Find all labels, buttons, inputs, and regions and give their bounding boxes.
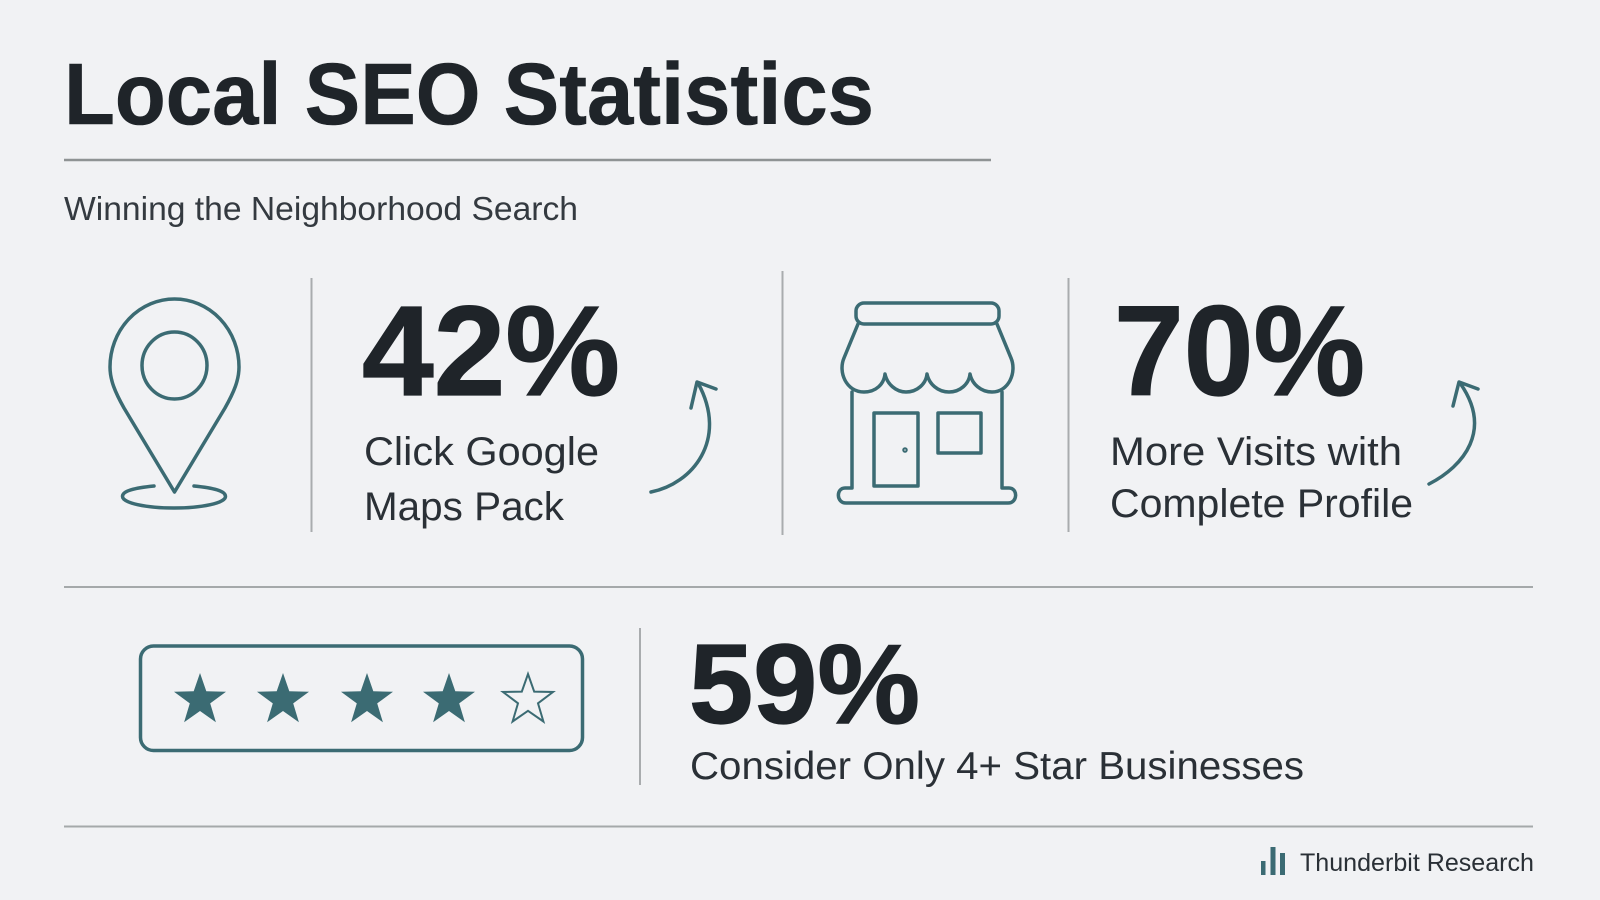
arrow: upward trend <box>651 382 716 492</box>
footer: source credit <box>1261 847 1534 877</box>
icon: storefront <box>838 303 1016 503</box>
stat: 59%: 59% <box>689 621 920 747</box>
label: More Visits with Complete Profile <box>1110 430 1413 526</box>
icon: map pin <box>110 299 239 508</box>
panel: complete profile statistic <box>838 280 1478 526</box>
panel: star rating statistic <box>140 621 1304 788</box>
panel: Google Maps Pack statistic <box>110 280 716 529</box>
subtitle: Winning the Neighborhood Search <box>64 190 578 227</box>
label: More Visits with Complete Profile: More Visits with <box>1110 430 1402 474</box>
label: Click Google Maps Pack: Click Google <box>364 430 599 474</box>
title: Local SEO Statistics <box>64 46 874 143</box>
header <box>64 46 991 227</box>
icon: rating box with stars <box>140 646 582 750</box>
label: Click Google Maps Pack: Maps Pack <box>364 485 565 529</box>
icon: bar chart <box>1261 847 1285 875</box>
label: Consider Only 4+ Star Businesses: Consider Only 4+ Star Businesses <box>690 745 1304 788</box>
source text: Thunderbit Research <box>1300 849 1534 877</box>
stat: 70%: 70% <box>1114 280 1365 423</box>
stat: 42%: 42% <box>362 280 620 423</box>
label: Click Google Maps Pack <box>364 430 599 529</box>
arrow: upward trend <box>1429 382 1478 484</box>
label: More Visits with Complete Profile: Complete Profile <box>1110 482 1413 526</box>
